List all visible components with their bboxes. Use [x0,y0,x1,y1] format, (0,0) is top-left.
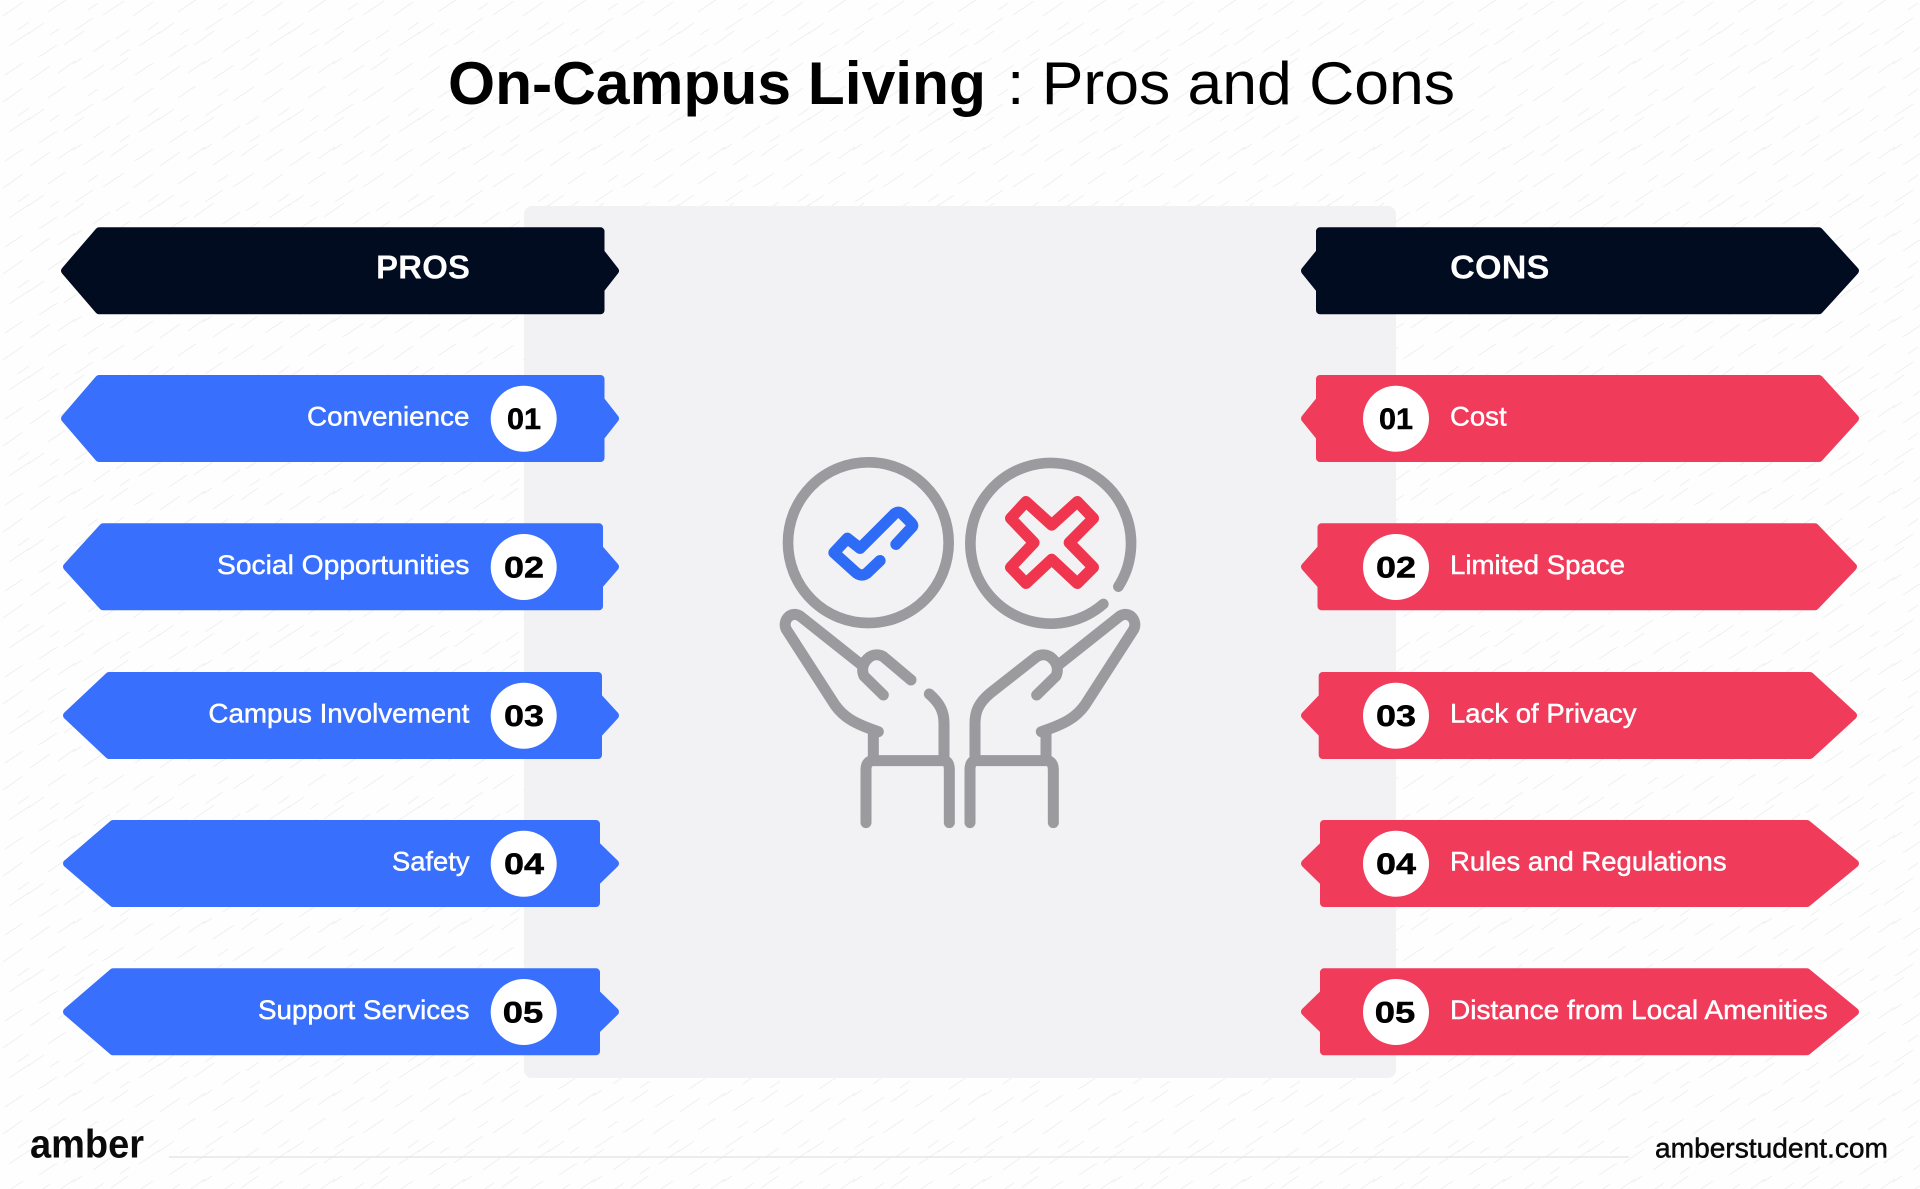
icon: cross mark [1011,502,1093,583]
banner: CONS header [1305,231,1855,310]
row: pro 02 Social Opportunities: 02 [504,551,544,584]
row: con 05 Distance from Local Amenities: Distance from Local Amenities [1450,995,1828,1025]
icon: right hand [970,614,1135,823]
icon: two hands holding check and cross [785,462,1135,823]
row: con 02 Limited Space [1305,527,1853,606]
icon: left hand [785,614,949,823]
banner: PROS header [65,231,615,310]
row: pro 04 Safety: Safety [392,847,470,877]
icon: check mark [834,512,913,575]
row: pro 01 Convenience: Convenience [307,402,470,432]
row: pro 03 Campus Involvement [67,676,615,755]
row: con 03 Lack of Privacy [1305,676,1853,755]
row: pro 05 Support Services: 05 [503,996,543,1029]
row: pro 01 Convenience [65,379,615,458]
footer: website: amberstudent.com [1655,1132,1888,1163]
row: pro 04 Safety [67,824,615,903]
row: con 02 Limited Space: Limited Space [1450,550,1625,580]
row: pro 05 Support Services: Support Services [258,995,470,1025]
title: : Pros and Cons [1007,50,1455,117]
row: pro 02 Social Opportunities [67,527,615,606]
row: pro 04 Safety: 04 [504,848,544,881]
row: pro 05 Support Services [67,972,615,1051]
icon: left circle [788,462,949,623]
row: con 04 Rules and Regulations: 04 [1376,848,1416,881]
footer: amber logo: amber [30,1122,144,1166]
row: con 01 Cost [1305,379,1855,458]
row: con 04 Rules and Regulations: Rules and Regulations [1450,847,1727,877]
banner: PROS header: PROS [376,248,470,285]
row: con 05 Distance from Local Amenities: 05 [1375,996,1415,1029]
panel: centre background [524,206,1396,1078]
row: pro 02 Social Opportunities: Social Opportunities [217,550,470,580]
row: con 04 Rules and Regulations [1305,824,1855,903]
row: con 05 Distance from Local Amenities [1305,972,1855,1051]
row: pro 03 Campus Involvement: 03 [504,700,544,733]
row: con 01 Cost: 01 [1379,403,1413,436]
row: con 03 Lack of Privacy: 03 [1376,700,1416,733]
title: On-Campus Living [448,50,986,117]
title [448,50,1455,117]
panel: pros column [65,231,615,1051]
banner: CONS header: CONS [1450,248,1550,285]
icon: right circle [970,463,1131,624]
row: con 02 Limited Space: 02 [1376,551,1416,584]
row: pro 03 Campus Involvement: Campus Involvement [208,699,470,729]
row: pro 01 Convenience: 01 [507,403,541,436]
row: con 03 Lack of Privacy: Lack of Privacy [1450,699,1637,729]
panel: cons column [1305,231,1855,1051]
row: con 01 Cost: Cost [1450,402,1507,432]
